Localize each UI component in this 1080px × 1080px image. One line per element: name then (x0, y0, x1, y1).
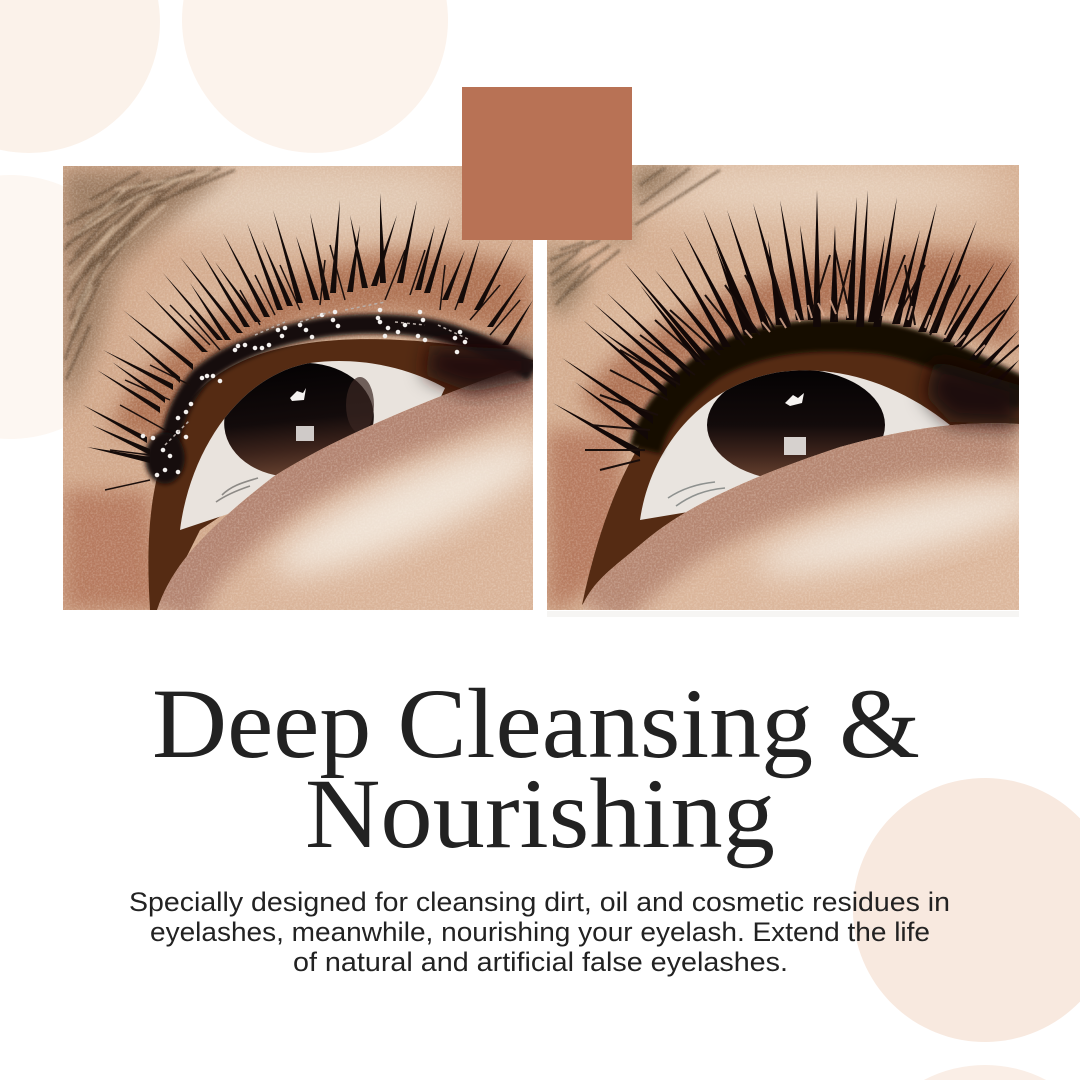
iris and pupil (224, 363, 374, 476)
background circle: bottom right (853, 778, 1080, 1042)
dark outer corner (425, 345, 533, 392)
brow bone highlight (158, 166, 462, 337)
sclera (180, 361, 445, 530)
upper lashes (553, 190, 1019, 457)
catchlight top (785, 393, 804, 406)
lower lashes (668, 482, 725, 506)
description line 3: of natural and artificial false eyelashes. (293, 947, 788, 977)
lower lashes (216, 478, 258, 502)
background circle: bottom edge (924, 1065, 1046, 1080)
background circle: left (0, 175, 142, 439)
lash root cluster at inner corner (145, 432, 185, 484)
catchlight square (296, 426, 314, 441)
skin shimmer texture (63, 166, 533, 610)
skin base (63, 166, 533, 610)
background circle: top left (0, 0, 160, 153)
background circle: top centre (182, 0, 448, 153)
dark outer corner (925, 360, 1019, 425)
brow bone highlight (626, 165, 1010, 329)
dense fine lash strokes (585, 250, 1019, 470)
lower lid with shimmer shadow (157, 362, 533, 610)
accent square (462, 87, 632, 240)
lid crease and rim (582, 342, 1019, 605)
fine lashes (105, 245, 520, 490)
title line 2: Nourishing (305, 758, 775, 869)
white divider beneath square (533, 240, 547, 611)
upper lashes (83, 193, 533, 463)
iris and pupil (707, 369, 885, 481)
photo panel: before cleansing, eye with glitter residue on lashes (63, 160, 560, 615)
lower lid with shimmer shadow (583, 423, 1019, 610)
brown eyeshadow above lashes (63, 252, 533, 610)
skin base (547, 165, 1019, 610)
photo panel: after cleansing, eye with clean lashes (547, 162, 1052, 615)
catchlight top (290, 388, 306, 401)
title line 1: Deep Cleansing & (152, 668, 920, 779)
sclera (640, 370, 950, 520)
description text (129, 887, 950, 977)
description line 1: Specially designed for cleansing dirt, oil and cosmetic residues in (129, 887, 950, 917)
description line 2: eyelashes, meanwhile, nourishing your eyelash. Extend the life (150, 917, 930, 947)
eyebrow (63, 168, 235, 420)
skin shimmer texture (547, 165, 1019, 610)
lash band (168, 324, 533, 450)
lash band (645, 335, 1025, 450)
eyebrow (547, 165, 720, 320)
light gaps between lashes (745, 300, 985, 355)
title (152, 668, 920, 869)
lid crease and rim (148, 339, 533, 610)
glitter smear strands (165, 302, 470, 445)
catchlight square (784, 437, 806, 455)
brown eyeshadow above lashes (547, 249, 1019, 610)
faint shadow strip below right panel (547, 611, 1019, 617)
glitter residue dots (143, 310, 465, 475)
